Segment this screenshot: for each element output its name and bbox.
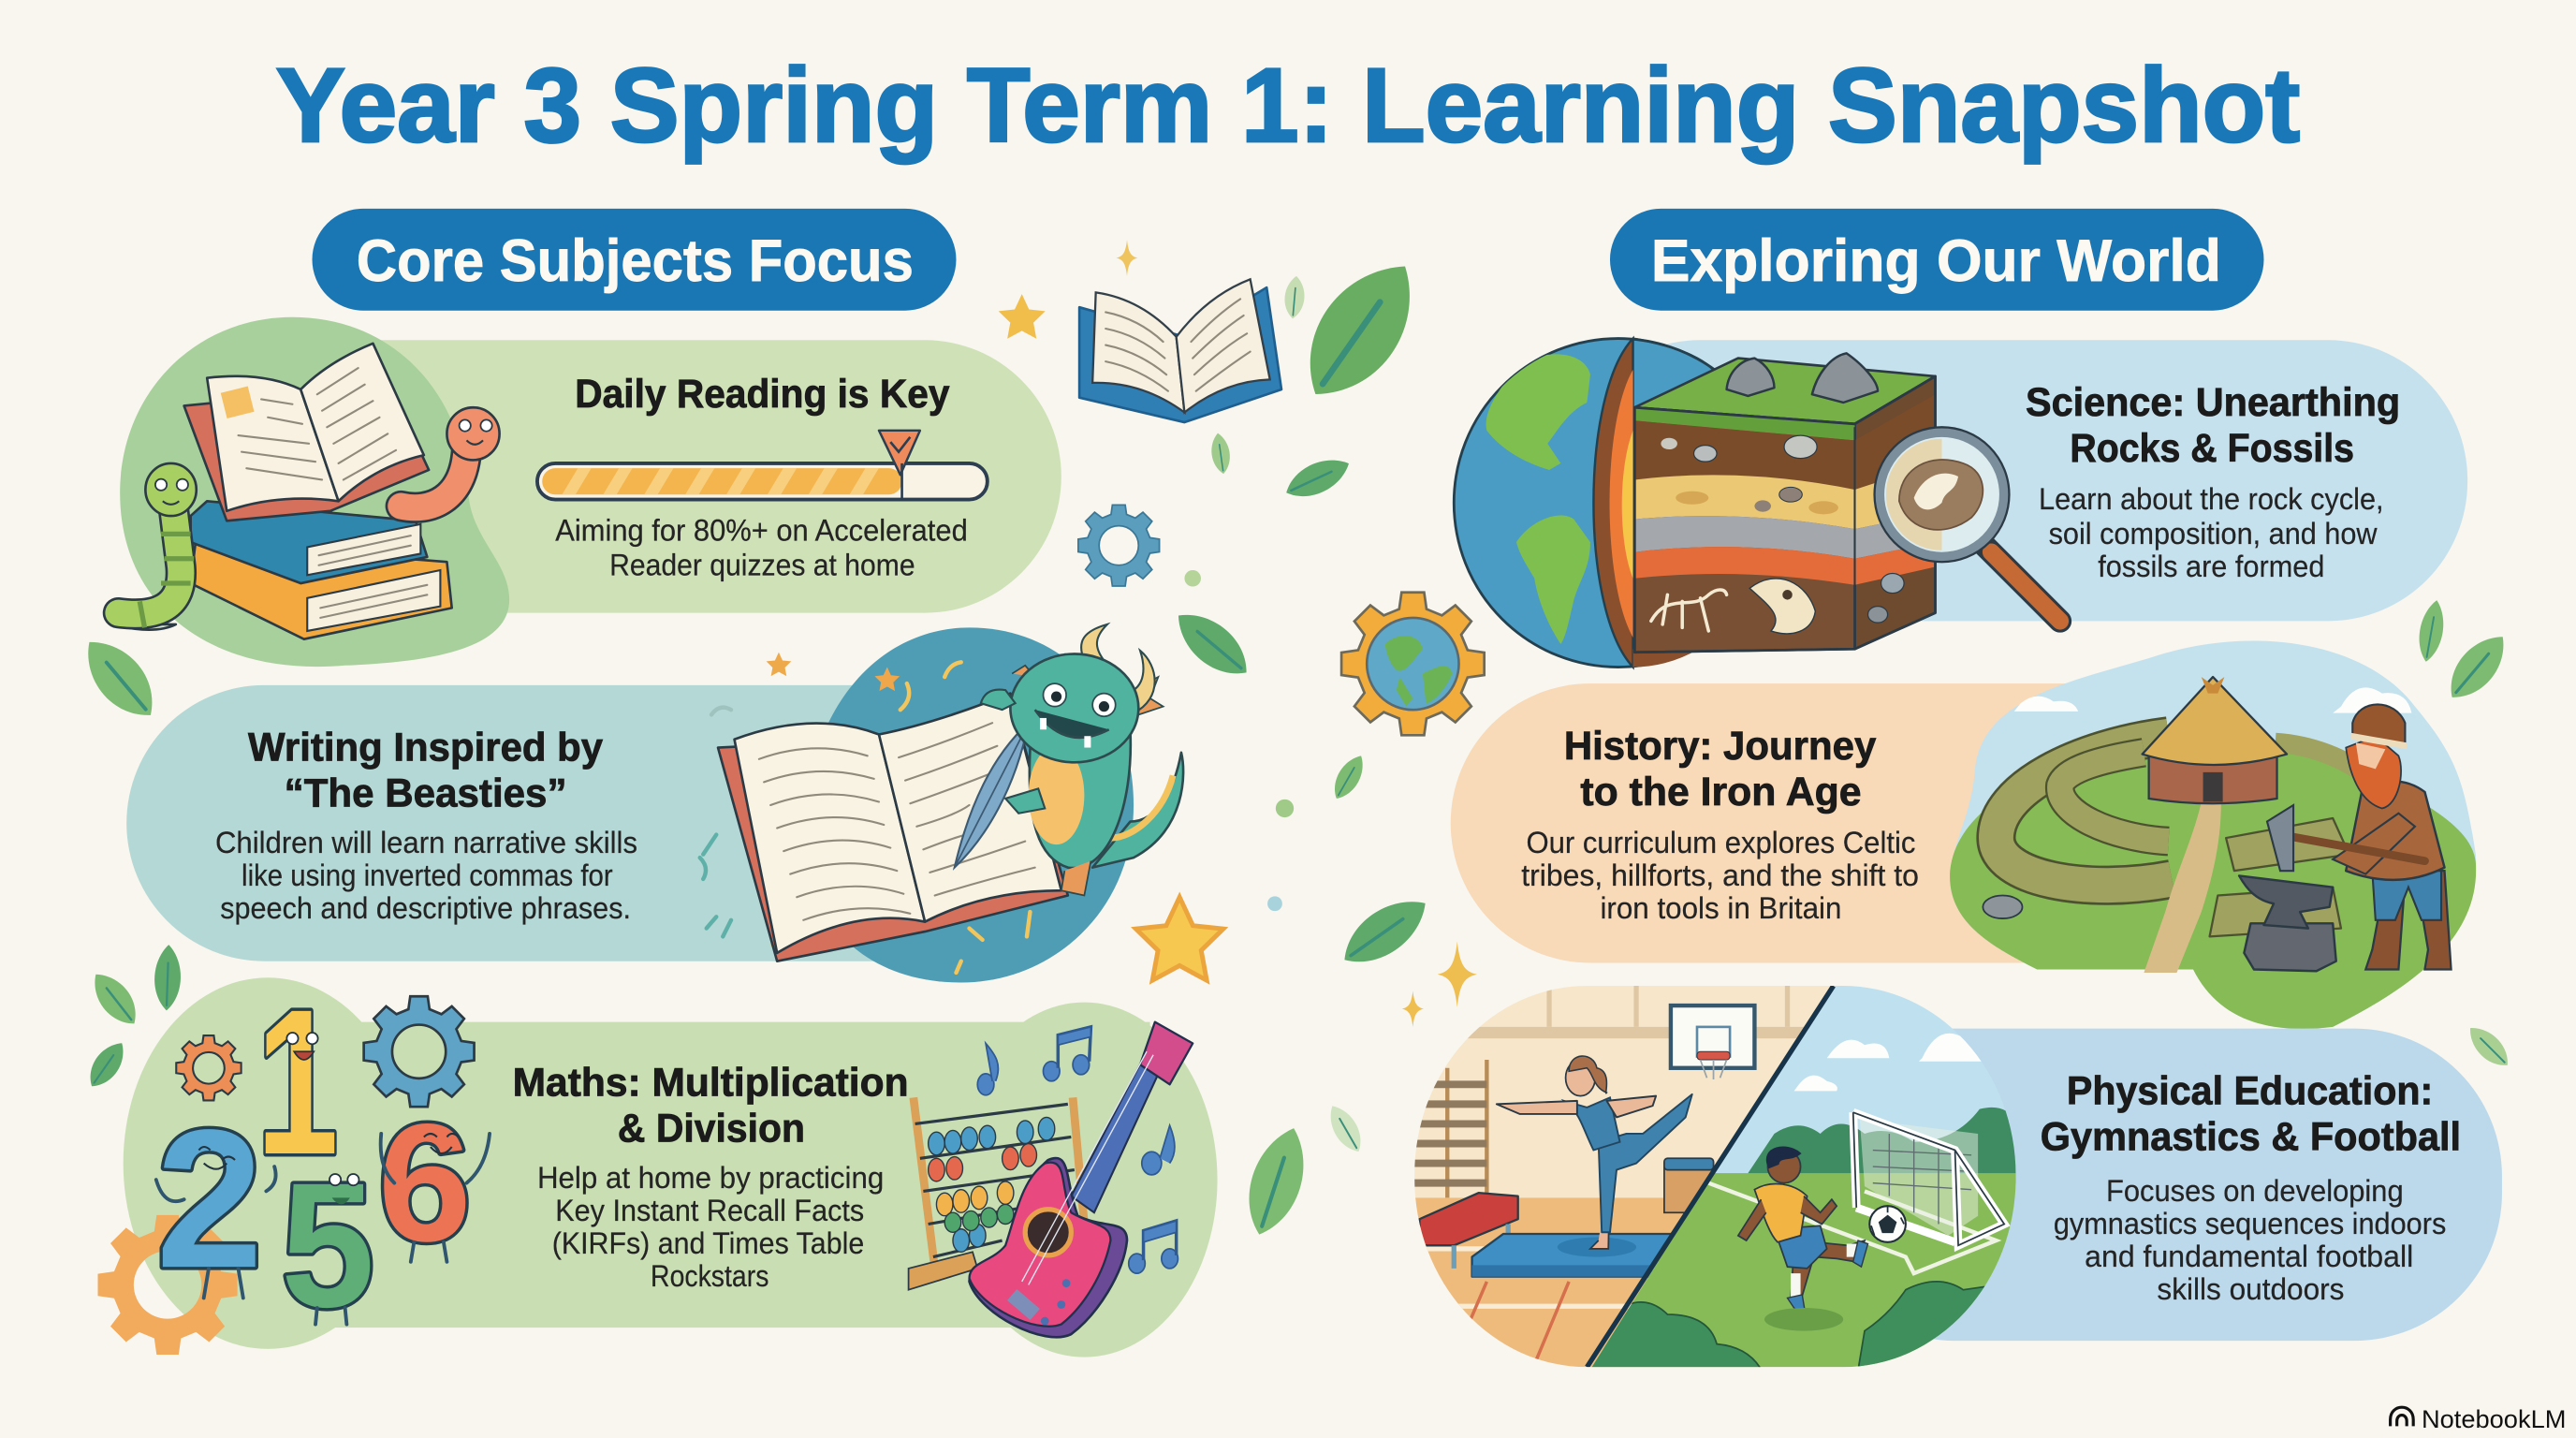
text: science heading — [2026, 380, 2400, 471]
icon: friendly beastie — [981, 624, 1183, 895]
illustration blob — [120, 317, 509, 667]
text: daily reading heading: Daily Reading is Key — [575, 372, 950, 417]
text: physical education body: gymnastics sequences indoors — [2054, 1207, 2446, 1240]
text: daily reading body — [555, 513, 968, 581]
text: science body: fossils are formed — [2098, 550, 2324, 583]
text: maths body — [537, 1161, 884, 1293]
text: physical education heading: Physical Education: — [2067, 1068, 2433, 1113]
text: writing body — [215, 826, 637, 925]
text: history body: tribes, hillforts, and the shift to — [1521, 858, 1919, 892]
illustration: split sports scene — [1397, 983, 2037, 1380]
text: maths body: (KIRFs) and Times Table — [552, 1226, 864, 1260]
heading: exploring our world: Exploring Our World — [1651, 228, 2221, 294]
icon: earth gear — [1341, 593, 1485, 735]
text: maths heading: & Division — [618, 1107, 805, 1152]
panel background — [246, 340, 1061, 613]
text: history body: Our curriculum explores Celtic — [1526, 826, 1915, 859]
heading: exploring our world — [1610, 209, 2263, 311]
text: science body: soil composition, and how — [2049, 517, 2378, 550]
illustration circle — [804, 627, 1134, 983]
text: science heading: Science: Unearthing — [2026, 380, 2400, 425]
text: physical education heading — [2041, 1068, 2461, 1160]
text: maths heading — [513, 1061, 909, 1152]
icon: anvil — [2239, 875, 2336, 971]
text: history body: iron tools in Britain — [1600, 891, 1841, 925]
panel: physical education — [1397, 983, 2502, 1380]
icon: gymnast — [1497, 1056, 1692, 1249]
text: daily reading body: Reader quizzes at home — [609, 548, 915, 581]
heading: core subjects focus — [313, 209, 956, 311]
number characters: 6 — [378, 1089, 472, 1276]
panel background — [126, 685, 1051, 961]
panel: writing — [126, 624, 1183, 983]
decorative stars and sparkles — [767, 240, 1477, 1027]
icon: football — [1869, 1206, 1906, 1242]
progress bar — [537, 431, 988, 500]
text: writing heading: Writing Inspired by — [248, 726, 603, 770]
text: physical education body: and fundamental football — [2085, 1240, 2413, 1273]
text: physical education body: skills outdoors — [2157, 1272, 2344, 1306]
decorative leaves — [72, 244, 2516, 1242]
number characters: 1 — [256, 966, 339, 1197]
text: physical education heading: Gymnastics & Football — [2041, 1115, 2461, 1160]
text: physical education body: Focuses on developing — [2106, 1174, 2404, 1208]
text: maths body: Key Instant Recall Facts — [555, 1194, 864, 1227]
text: writing body: speech and descriptive phrases. — [220, 891, 631, 925]
text: science body: Learn about the rock cycle, — [2039, 482, 2384, 516]
number characters — [156, 966, 490, 1344]
text: history heading — [1564, 724, 1876, 814]
scene: outdoor football pitch — [1591, 986, 2016, 1367]
text: physical education body — [2054, 1174, 2446, 1306]
icon: rock layers block — [1634, 353, 1935, 653]
title: Year 3 Spring Term 1: Learning Snapshot — [276, 46, 2300, 164]
icon: football player — [1738, 1148, 1868, 1331]
icon: open book and quill — [718, 694, 1068, 961]
text: writing heading — [248, 726, 603, 816]
illustration: hillfort scene — [1950, 640, 2476, 1029]
icon: blue gear — [364, 996, 475, 1107]
heading: core subjects focus: Core Subjects Focus — [357, 228, 914, 294]
text: science body — [2039, 482, 2384, 583]
icon: centre open book — [1079, 279, 1281, 422]
panel background — [124, 977, 1218, 1357]
notebooklm watermark: NotebookLM — [2422, 1404, 2566, 1433]
text: maths body: Help at home by practicing — [537, 1161, 884, 1195]
panel background — [1560, 340, 2467, 621]
text: history heading: History: Journey — [1564, 724, 1876, 769]
panel background — [1808, 1029, 2502, 1341]
icon: notebooklm logo — [2391, 1407, 2413, 1426]
icon: confetti — [700, 662, 1030, 973]
icon: small orange gear — [176, 1035, 242, 1100]
icon: iron age smith — [2267, 704, 2452, 969]
panel: daily reading — [118, 317, 1061, 667]
scene: indoor gymnastics hall — [1414, 986, 1831, 1367]
icon: pink guitar — [970, 1022, 1193, 1337]
icon: big orange gear — [98, 1215, 238, 1355]
icon: blue gear — [1078, 505, 1160, 586]
text: writing body: like using inverted commas for — [242, 858, 613, 892]
text: writing heading: “The Beasties” — [285, 771, 567, 816]
panel: maths — [98, 966, 1218, 1357]
icon: magnifying glass — [1875, 427, 2060, 621]
text: maths heading: Maths: Multiplication — [513, 1061, 909, 1106]
icon: earth cross-section — [1453, 335, 1715, 670]
icon: music notes — [977, 1027, 1178, 1273]
icon: book stack with worms — [118, 344, 500, 639]
panel: history — [1451, 640, 2476, 1029]
number characters: 2 — [156, 1088, 263, 1309]
panel: science — [1454, 339, 2467, 668]
text: science heading: Rocks & Fossils — [2070, 426, 2354, 471]
text: writing body: Children will learn narrative skills — [215, 826, 637, 859]
panel background — [1451, 683, 2272, 962]
icon: abacus — [909, 1097, 1084, 1290]
text: daily reading body: Aiming for 80%+ on Accelerated — [555, 513, 968, 547]
number characters: 5 — [281, 1146, 374, 1344]
icon: goal — [1853, 1112, 2004, 1245]
text: maths body: Rockstars — [651, 1259, 768, 1293]
text: history body — [1521, 826, 1919, 925]
text: history heading: to the Iron Age — [1580, 770, 1862, 814]
